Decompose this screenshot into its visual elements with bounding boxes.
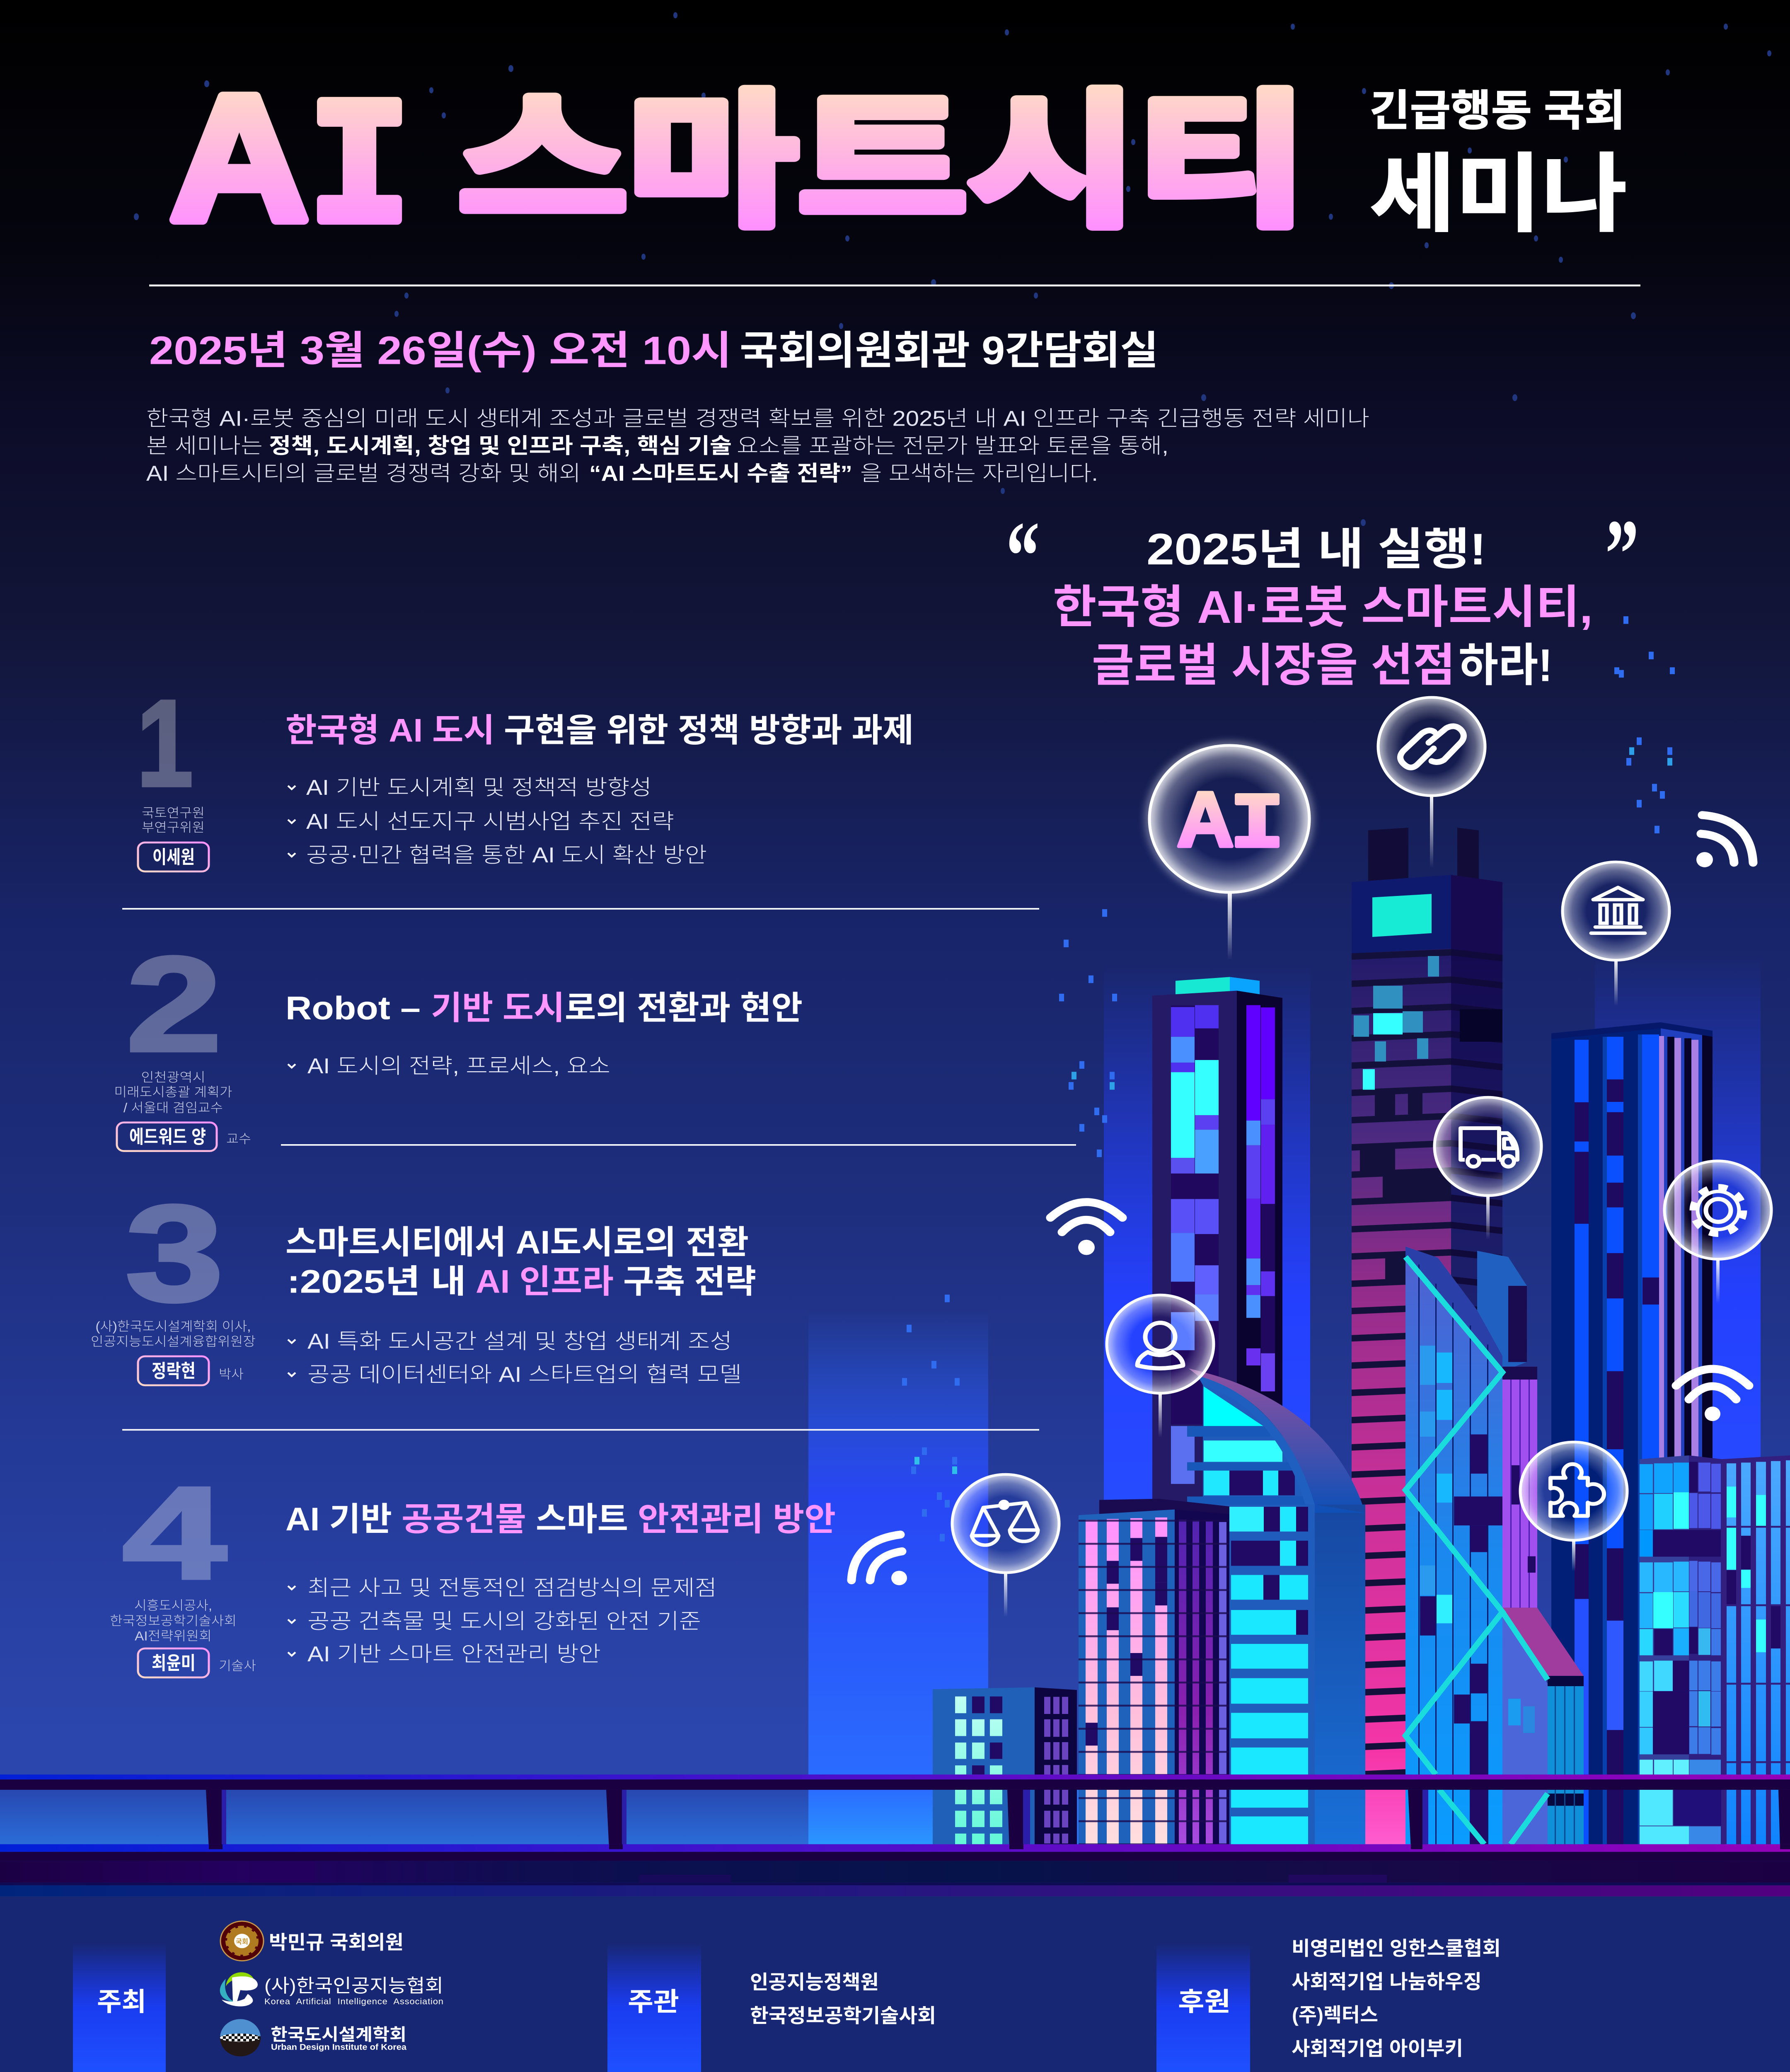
callout: person icon bubble [1107,1295,1214,1438]
panel: session 4: 안전관리 방안 [638,1501,836,1537]
building: right striped block [1722,1455,1790,1844]
panel: sponsors: (주)렉터스 [1292,2005,1378,2026]
quote headline: 하라! [1459,640,1553,691]
panel: session 3: 공공 데이터센터와 AI 스타트업의 협력 모델 [307,1363,742,1387]
logo: Korea AI Association [220,1972,258,2007]
title: AI 스마트시티 [170,58,1307,274]
panel: session 1: 공공·민간 협력을 통한 AI 도시 확산 방안 [306,843,707,867]
quote headline: 한국형 AI·로봇 스마트시티, [1053,582,1593,633]
panel: organizer: 주관 [628,1987,679,2016]
logo: national assembly seal: 국회 [236,1938,248,1946]
background stars [134,12,1771,526]
building: glass zig-zag tower [1405,1247,1584,1844]
panel: session 3: 스마트시티에서 AI도시로의 전환 [285,1224,749,1261]
quote headline [1006,499,1639,691]
panel: session 3: :2025년 내 [287,1263,466,1300]
panel: session 1: AI 기반 도시계획 및 정책적 방향성 [306,776,652,800]
number 2: 2 [126,929,222,1080]
building: centre tall tower [1352,828,1502,1844]
logo: national assembly seal [220,1921,264,1961]
panel: host: Korea Artificial Intelligence Association [264,1997,443,2006]
panel: sponsors [1156,1938,1501,2072]
intro text: 본 세미나는 [146,434,263,458]
panel: session 1: 이세원 [152,847,195,867]
panel: sponsors: 사회적기업 아이부키 [1292,2038,1463,2060]
panel: session 4: 공공 건축물 및 도시의 강화된 안전 기준 [307,1610,701,1634]
panel: session 3: 정락현 [152,1360,196,1381]
panel: session 3: AI 인프라 [476,1263,614,1300]
panel: session 3: (사)한국도시설계학회 이사, [95,1319,251,1334]
panel: organizer: 인공지능정책원 [750,1972,879,1993]
panel: session 4: 기술사 [219,1658,256,1673]
number 4: 4 [122,1460,228,1607]
callout: link icon bubble [1378,697,1485,868]
logo: Urban Design Institute [220,2019,261,2056]
title: AI 스마트시티: I [309,70,410,274]
building: right tall tower [1551,1022,1713,1844]
panel: session 3: 인공지능도시설계융합위원장 [91,1334,256,1349]
panel: session 4: AI 기반 [285,1501,392,1537]
title: AI 스마트시티: 스마트시티 [458,80,1307,244]
footer background [0,1896,1790,2072]
light beams [0,952,1790,1844]
panel: session 4 [110,1460,836,1677]
panel: sponsors: 후원 [1178,1987,1231,2016]
panel: session 1: AI 도시 선도지구 시범사업 추진 전략 [306,810,674,833]
callout: scale icon bubble [952,1474,1059,1617]
panel: session 2: 로의 전환과 현안 [565,990,803,1026]
callout: AI bubble [1149,746,1309,960]
panel: session 4: 스마트 [536,1501,628,1537]
callout: truck icon bubble [1434,1097,1541,1240]
panel: session 4: AI 기반 스마트 안전관리 방안 [307,1642,601,1666]
panel: session 3: 구축 전략 [623,1263,756,1300]
panel: host: Urban Design Institute of Korea [271,2043,406,2052]
panel: host: 주최 [97,1987,146,2016]
panel: session 4: 시흥도시공사, [134,1598,212,1613]
panel: session 2: 미래도시총괄 계획가 [114,1084,232,1099]
panel: session 1: 구현을 위한 정책 방향과 과제 [504,712,914,749]
panel: session 3: 박사 [219,1367,244,1382]
building: left tall tower [1152,977,1282,1523]
callout: AI bubble: I [1230,782,1284,870]
floating pixels [902,616,1675,1542]
panel: session 2: 에드워드 양 [129,1126,206,1147]
panel: host: (사)한국인공지능협회 [264,1975,443,1996]
intro text: 정책, 도시계획, 창업 및 인프라 구축, 핵심 기술 [269,434,732,458]
subtitle: 긴급행동 국회 세미나: 긴급행동 국회 [1369,87,1625,134]
intro text: AI 스마트시티의 글로벌 경쟁력 강화 및 해외 [146,462,581,485]
panel: host [73,1921,443,2072]
building: small front block [933,1687,1077,1844]
building: pink window block [1079,1499,1229,1844]
intro text: 한국형 AI·로봇 중심의 미래 도시 생태계 조성과 글로벌 경쟁력 확보를 위한 2025년 내 AI 인프라 구축 긴급행동 전략 세미나 [146,407,1369,431]
callout: puzzle icon bubble [1520,1442,1627,1571]
panel: session 2 [114,929,803,1151]
building: arched tower [1187,1368,1365,1844]
panel: session 1: 국토연구원 [142,806,205,820]
panel: sponsors: 비영리법인 잉한스쿨협회 [1292,1938,1501,1959]
callout: AI bubble: A [1177,776,1234,863]
panel: sponsors: 사회적기업 나눔하우징 [1292,1972,1482,1993]
quote headline: ” [1605,499,1639,609]
panel: host: 박민규 국회의원 [269,1932,404,1953]
city skyline [933,828,1790,1844]
panel: session 1: 한국형 AI 도시 [285,712,495,749]
panel: organizer: 한국정보공학기술사회 [750,2005,936,2027]
building: cyan window tower [1640,1455,1722,1844]
title: AI 스마트시티: A [170,58,309,258]
date and venue [149,329,1159,373]
number 1: 1 [137,674,193,812]
panel: session 4: 한국정보공학기술사회 [110,1613,237,1628]
panel: organizer [607,1943,936,2072]
panel: session 2: 인천광역시 [141,1070,206,1084]
callout: gear icon bubble [1664,1161,1771,1303]
subtitle: 긴급행동 국회 세미나: 세미나 [1369,146,1627,242]
intro text: 을 모색하는 자리입니다. [860,462,1098,485]
panel: host: 한국도시설계학회 [271,2025,406,2044]
quote headline: 2025년 내 실행! [1147,524,1486,574]
panel: session 1: 부연구위원 [142,820,205,835]
panel: session 4: AI전략위원회 [135,1629,212,1643]
quote headline: 글로벌 시장을 선점 [1092,640,1455,691]
intro text: “AI 스마트도시 수출 전략” [589,462,852,485]
number 3: 3 [125,1177,224,1330]
panel: session 4: 공공건물 [402,1501,526,1537]
elevated road and waterfront [0,1774,1790,1896]
panel: session 4: 최윤미 [152,1653,196,1673]
quote headline: “ [1006,501,1040,611]
panel: session 2: 기반 도시 [431,990,565,1026]
callout: institution icon bubble [1563,862,1669,1006]
intro text: 요소를 포괄하는 전문가 발표와 토론을 통해, [737,434,1168,458]
panel: session 2: AI 도시의 전략, 프로세스, 요소 [307,1054,610,1078]
panel: session 3: AI 특화 도시공간 설계 및 창업 생태계 조성 [307,1330,732,1353]
panel: session 1 [137,674,914,871]
panel: session 2: Robot – [285,990,421,1026]
date and venue: 국회의원회관 9간담회실 [740,329,1159,373]
panel: session 2: / 서울대 겸임교수 [123,1100,223,1115]
icon: wifi signals [851,815,1753,1585]
panel: session 2: 교수 [226,1131,251,1146]
date and venue: 2025년 3월 26일(수) 오전 10시 [149,329,732,373]
intro text [146,407,1369,485]
subtitle: 긴급행동 국회 세미나 [1369,87,1627,242]
panel: session 3 [91,1177,756,1387]
panel: session 4: 최근 사고 및 전통적인 점검방식의 문제점 [307,1576,717,1600]
